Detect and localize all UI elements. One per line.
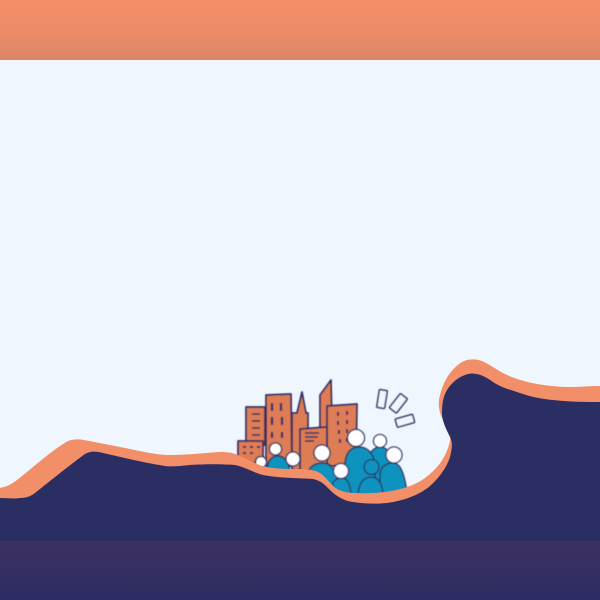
icon: flying debris	[377, 389, 415, 427]
debris piece two	[389, 393, 407, 413]
debris piece one	[377, 389, 387, 409]
person: front left	[333, 464, 351, 497]
person: tall blue	[345, 430, 375, 497]
person: left head only	[256, 456, 266, 468]
top header band	[0, 0, 600, 60]
building: right tower	[327, 404, 357, 466]
building: centre low block	[300, 427, 327, 471]
orange wave outline	[0, 359, 600, 600]
building: left mid-rise	[246, 407, 265, 445]
debris piece three	[395, 414, 415, 427]
person: small back left	[267, 443, 290, 472]
building: spire tower	[292, 392, 308, 470]
building: low left block	[238, 441, 263, 463]
person: middle	[309, 445, 338, 490]
person: back right	[369, 434, 391, 497]
navy hillside	[0, 374, 600, 600]
person: right	[380, 447, 407, 497]
building: tall slanted tower	[320, 380, 332, 428]
icon: city skyline	[238, 380, 357, 471]
bottom footer band	[0, 541, 600, 600]
person: left side head	[286, 452, 300, 466]
person: front centre	[358, 460, 383, 497]
icon: crowd of people	[256, 430, 407, 497]
building: tall centre tower	[266, 394, 292, 466]
